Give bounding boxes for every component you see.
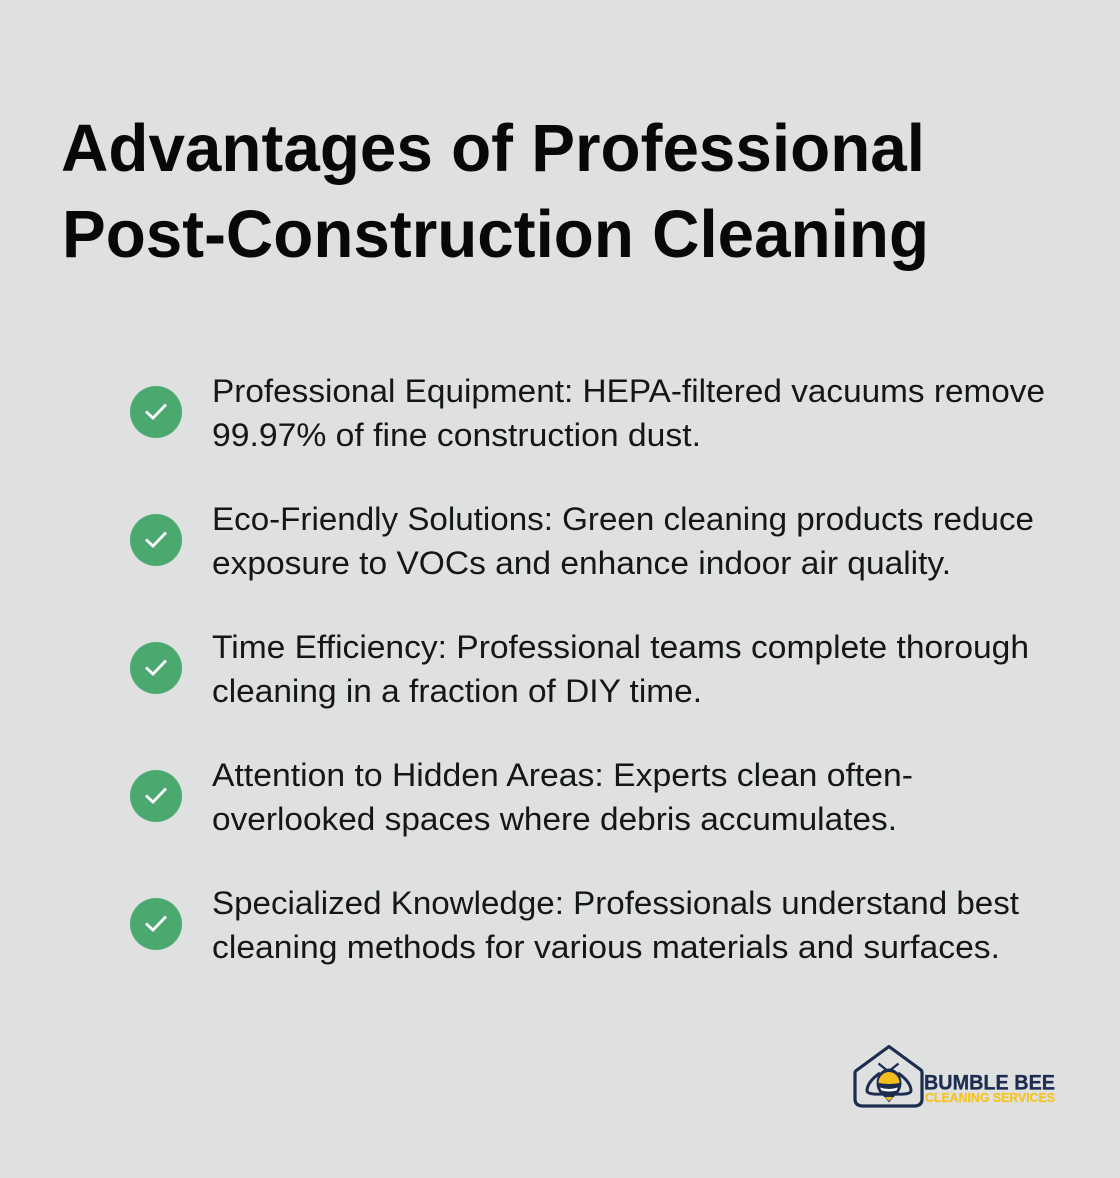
text: attention to hidden areas — [212, 757, 913, 837]
text: specialized knowledge: cleaning methods for various materials and surfaces. — [212, 929, 1000, 965]
logo: Bumble Bee Cleaning Services — [855, 1046, 1055, 1106]
text: time efficiency — [212, 629, 1029, 709]
icon: check 4 — [130, 770, 182, 822]
brand name: BUMBLE BEE — [924, 1072, 1055, 1094]
item: attention to hidden areas — [130, 757, 913, 837]
text: specialized knowledge — [212, 885, 1019, 965]
text: professional equipment: Professional Equipment: HEPA-filtered vacuums remove — [212, 373, 1045, 409]
title: Post-Construction Cleaning — [62, 197, 929, 272]
text: attention to hidden areas: Attention to Hidden Areas: Experts clean often- — [212, 757, 913, 793]
icon: house with bee — [855, 1046, 922, 1106]
brand tagline: CLEANING SERVICES — [925, 1091, 1055, 1105]
icon: check 1 — [130, 386, 182, 438]
item: eco-friendly solutions — [130, 501, 1034, 581]
text: eco-friendly solutions: Eco-Friendly Solutions: Green cleaning products reduce — [212, 501, 1034, 537]
text: specialized knowledge: Specialized Knowledge: Professionals understand best — [212, 885, 1019, 921]
icon: check 3 — [130, 642, 182, 694]
icon: check 2 — [130, 514, 182, 566]
list of advantages — [130, 373, 1045, 965]
text: professional equipment: 99.97% of fine construction dust. — [212, 417, 701, 453]
text: eco-friendly solutions — [212, 501, 1034, 581]
icon: check 5 — [130, 898, 182, 950]
text: professional equipment — [212, 373, 1045, 453]
text: time efficiency: cleaning in a fraction of DIY time. — [212, 673, 702, 709]
item: specialized knowledge — [130, 885, 1019, 965]
item: professional equipment — [130, 373, 1045, 453]
title — [61, 111, 929, 272]
title: Advantages of Professional — [61, 111, 925, 186]
text: attention to hidden areas: overlooked spaces where debris accumulates. — [212, 801, 897, 837]
text: eco-friendly solutions: exposure to VOCs and enhance indoor air quality. — [212, 545, 951, 581]
item: time efficiency — [130, 629, 1029, 709]
text: time efficiency: Time Efficiency: Professional teams complete thorough — [212, 629, 1029, 665]
